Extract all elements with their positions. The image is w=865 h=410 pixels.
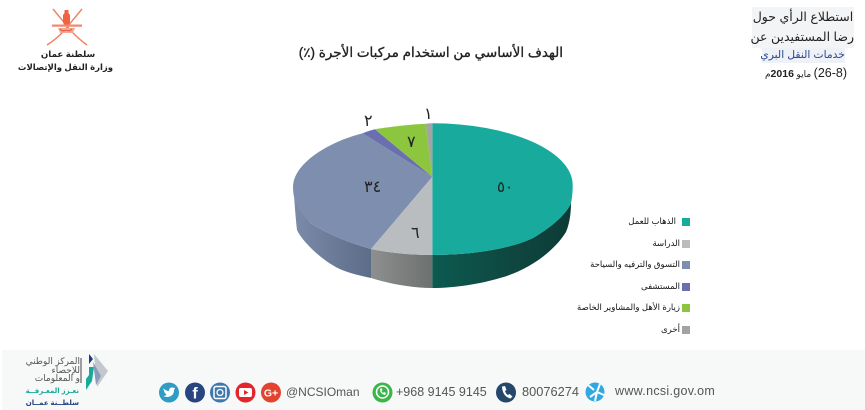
legend item: study: الدراسة bbox=[652, 238, 680, 248]
sultanate: سلطــنة عمــان bbox=[26, 400, 79, 407]
legend item: hospital: المستشفى bbox=[641, 281, 680, 291]
website: www.ncsi.gov.om bbox=[615, 384, 715, 398]
NCSI logo text bbox=[26, 356, 80, 407]
slogan: نعـزز المعـرفــة bbox=[26, 388, 79, 395]
icon: youtube bbox=[236, 382, 256, 402]
footer band bbox=[2, 350, 865, 410]
side: blue slice bbox=[294, 195, 371, 278]
phone number: 80076274 bbox=[522, 384, 579, 399]
slice: green 7 bbox=[375, 124, 432, 177]
label 1: ١ bbox=[424, 106, 433, 123]
legend item: other bbox=[661, 324, 690, 334]
legend item: shopping: التسوق والترفيه والسياحة bbox=[590, 259, 680, 269]
slice: gray 6 bbox=[371, 177, 432, 255]
heading line 2: رضا المستفيدين عن bbox=[751, 30, 854, 44]
side: teal slice bbox=[432, 203, 571, 288]
heading line 2 bbox=[752, 27, 854, 48]
icon: phone bbox=[496, 382, 516, 402]
twitter handle: @NCSIOman bbox=[286, 385, 360, 399]
ministry line: وزارة النقل والإتصالات bbox=[18, 62, 113, 72]
centre name: المركز الوطني bbox=[26, 356, 80, 366]
icon: globe bbox=[586, 382, 604, 402]
icon: facebook: f bbox=[192, 386, 198, 402]
centre name: للإحصاء bbox=[52, 365, 80, 375]
logo divider bbox=[80, 358, 82, 383]
icon: twitter bbox=[159, 382, 179, 402]
whatsapp number: +968 9145 9145 bbox=[396, 385, 487, 399]
legend item: other: أخرى bbox=[661, 324, 680, 334]
centre name bbox=[26, 356, 80, 384]
slice: teal 50 bbox=[432, 123, 573, 255]
slice: blue 34 bbox=[293, 133, 432, 249]
legend item: work: الذهاب للعمل bbox=[628, 216, 676, 226]
heading line 1: استطلاع الرأي حول bbox=[753, 10, 853, 24]
label 50: ٥٠ bbox=[497, 179, 513, 196]
data labels bbox=[364, 106, 513, 242]
centre name: و المعلومات bbox=[35, 373, 80, 383]
icon: google plus bbox=[261, 382, 281, 402]
label 34: ٣٤ bbox=[364, 179, 381, 196]
legend item: family: زيارة الأهل والمشاوير الخاصة bbox=[577, 302, 680, 312]
icon: instagram bbox=[210, 382, 230, 402]
heading line 1 bbox=[752, 7, 854, 27]
heading line 3: خدمات النقل البري bbox=[760, 49, 845, 61]
sultanate name: سلطنة عمان bbox=[41, 49, 95, 59]
chart title: الهدف الأساسي من استخدام مركبات الأجرة (٪) bbox=[299, 45, 563, 60]
side: gray slice bbox=[371, 249, 432, 288]
logo mark bbox=[86, 354, 108, 390]
icon: facebook bbox=[185, 382, 205, 402]
icon: whatsapp bbox=[372, 382, 392, 402]
legend bbox=[577, 216, 690, 334]
label 6: ٦ bbox=[411, 225, 420, 242]
survey heading panel bbox=[751, 7, 854, 80]
ministry name bbox=[18, 49, 113, 72]
slice: purple 2 bbox=[363, 129, 432, 177]
icon: google plus: G+ bbox=[264, 388, 278, 400]
label 7: ٧ bbox=[407, 134, 416, 151]
survey dates: (26-8) مايو 2016م bbox=[765, 66, 847, 80]
slice: gray 1 bbox=[426, 123, 432, 177]
label 2: ٢ bbox=[364, 113, 373, 130]
